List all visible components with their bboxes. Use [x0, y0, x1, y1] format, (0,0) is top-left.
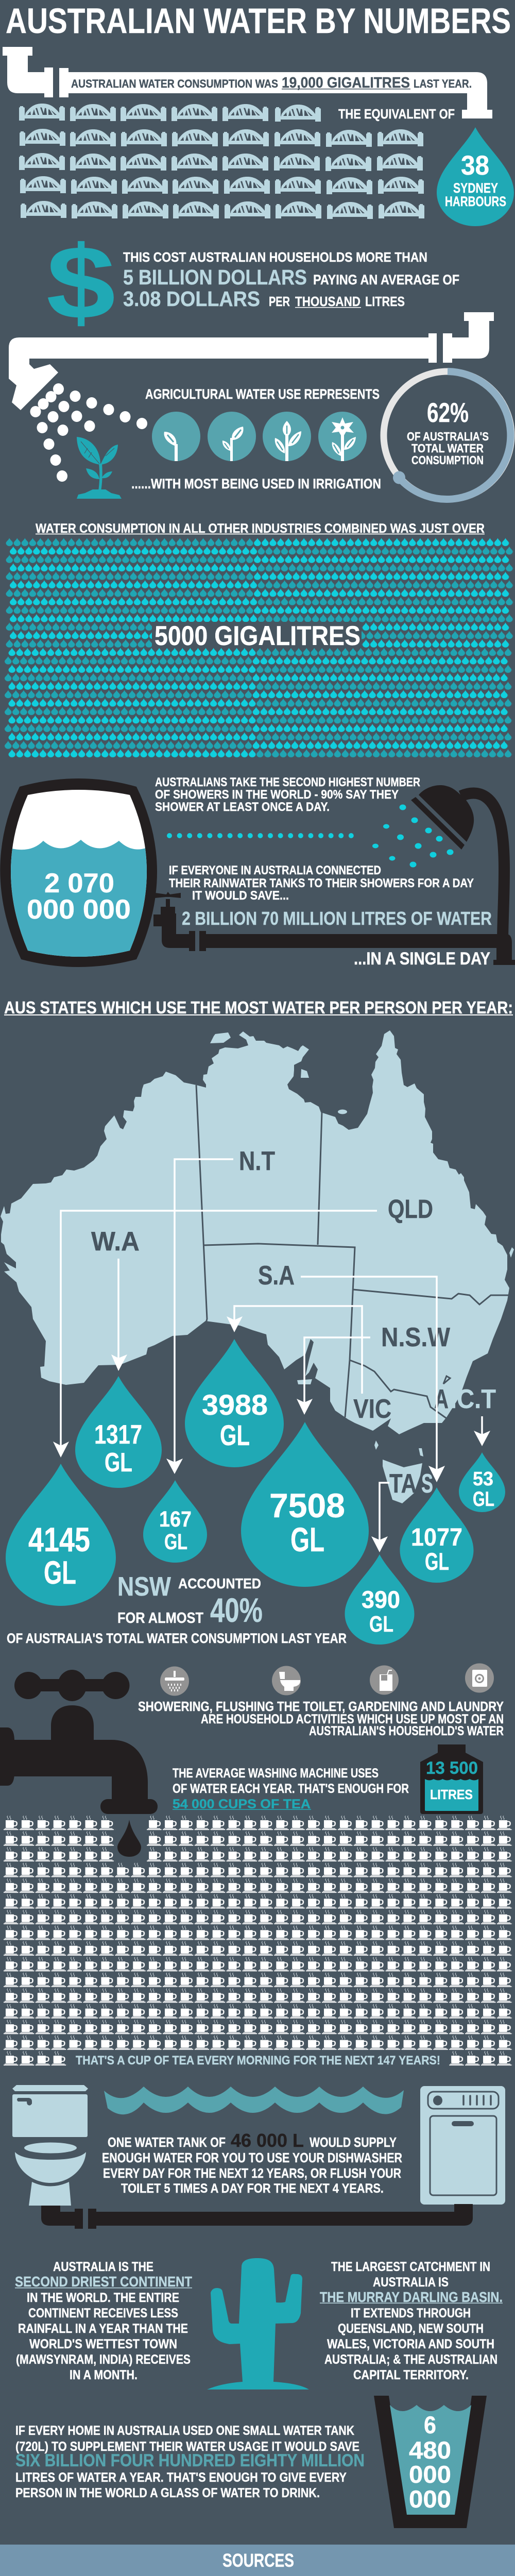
state values: GL — [473, 1488, 494, 1511]
water tank text: EVERY DAY FOR THE NEXT 12 YEARS, OR FLUSH YOUR — [103, 2165, 401, 2181]
water tank text: WOULD SUPPLY — [310, 2134, 397, 2150]
icon: toilet — [12, 2085, 88, 2206]
icon: glass of water: 480 — [409, 2436, 451, 2464]
rainwater savings text — [169, 863, 492, 969]
small tank text — [15, 2424, 365, 2500]
cost text: THOUSAND — [295, 294, 360, 309]
map labels: QLD — [388, 1194, 433, 1224]
icon: irrigation pipe — [9, 312, 494, 410]
consumption statement: 19,000 GIGALITRES — [282, 75, 410, 91]
map labels: .C.T — [450, 1384, 496, 1414]
chart: 62 percent ring: 62% — [427, 398, 469, 428]
driest continent text: SECOND DRIEST CONTINENT — [15, 2274, 192, 2290]
icon: washing machine — [465, 1663, 494, 1693]
driest continent text: AUSTRALIA IS THE — [53, 2260, 153, 2274]
map labels — [91, 1146, 496, 1499]
cost text — [123, 249, 459, 311]
sources heading: SOURCES — [222, 2550, 294, 2571]
NSW share callout: OF AUSTRALIA'S TOTAL WATER CONSUMPTION LAST YEAR — [7, 1631, 347, 1646]
icon: water waves — [104, 2087, 404, 2114]
icon: plant growth stage 1 — [152, 412, 200, 461]
icon: 13 500 litres bottle — [420, 1744, 483, 1814]
map labels: N.T — [239, 1146, 275, 1176]
state values: GL — [290, 1520, 324, 1558]
water tank text: TOILET 5 TIMES A DAY FOR THE NEXT 4 YEARS. — [121, 2181, 384, 2196]
state drops — [6, 1339, 505, 1645]
NSW share callout: FOR ALMOST — [117, 1610, 203, 1626]
panel: other industries — [5, 521, 513, 758]
murray darling text: CAPITAL TERRITORY. — [353, 2368, 469, 2382]
icon: cactus — [207, 2258, 309, 2389]
connector arrows — [53, 1159, 490, 1552]
panel: showers and rainwater — [0, 775, 515, 979]
driest continent text — [15, 2260, 192, 2382]
water tank text: ONE WATER TANK OF — [108, 2134, 226, 2150]
small tank text: SIX BILLION FOUR HUNDRED EIGHTY MILLION — [15, 2451, 365, 2470]
icon: seedling — [77, 437, 122, 499]
consumption statement — [71, 75, 472, 91]
icon: 13 500 litres bottle: 13 500 — [426, 1758, 478, 1778]
small tank text: IF EVERY HOME IN AUSTRALIA USED ONE SMALL WATER TANK — [15, 2424, 354, 2438]
panel: household cost — [46, 224, 459, 341]
map labels: S.A — [258, 1261, 295, 1291]
panel: water tank — [12, 2085, 505, 2229]
consumption statement: LAST YEAR. — [414, 77, 472, 90]
state values: 1317 — [94, 1420, 142, 1450]
driest continent text: IN A MONTH. — [70, 2368, 138, 2382]
icon: dollar sign: $ — [46, 224, 115, 341]
rainwater savings text: ...IN A SINGLE DAY — [354, 949, 490, 969]
panel: household activities — [0, 1663, 513, 2067]
driest continent text: CONTINENT RECEIVES LESS — [28, 2306, 178, 2320]
panel: dry continent — [15, 2258, 503, 2389]
state values: 53 — [473, 1468, 493, 1490]
small tank text: (720L) TO SUPPLEMENT THEIR WATER USAGE IT WOULD SAVE — [15, 2439, 359, 2454]
shower statistic text: OF SHOWERS IN THE WORLD - 90% SAY THEY — [155, 788, 399, 802]
shower statistic text — [155, 775, 420, 814]
irrigation caption: ......WITH MOST BEING USED IN IRRIGATION — [131, 476, 381, 492]
map labels: A — [434, 1384, 449, 1414]
icon: plant growth stage 3 — [263, 412, 311, 461]
chart: 62 percent ring: TOTAL WATER — [411, 442, 484, 455]
panel: state map — [1, 998, 514, 1646]
icon: plant growth stage 2 — [208, 412, 256, 461]
state values: GL — [425, 1548, 449, 1575]
icon: toilet — [272, 1666, 301, 1695]
panel: small water tank — [15, 2396, 487, 2528]
cost text: 5 BILLION DOLLARS — [123, 265, 307, 289]
pictogram: cups of tea — [4, 1816, 513, 2067]
murray darling text: AUSTRALIA IS — [373, 2275, 449, 2290]
water tank text: 46 000 L — [231, 2130, 304, 2151]
small tank text: LITRES OF WATER A YEAR. THAT'S ENOUGH TO GIVE EVERY — [15, 2470, 347, 2485]
icon: connecting pipe — [41, 2204, 473, 2229]
driest continent text: (MAWSYNRAM, INDIA) RECEIVES — [16, 2352, 191, 2367]
map labels: VIC — [353, 1394, 391, 1424]
NSW share callout: NSW — [117, 1572, 171, 1602]
state values: GL — [369, 1612, 393, 1637]
state values: 4145 — [28, 1520, 90, 1558]
icon: tap — [0, 1670, 158, 1857]
pictogram: harbour bridges — [19, 104, 424, 219]
panel: sources — [0, 2545, 515, 2576]
murray darling text: IT EXTENDS THROUGH — [351, 2306, 471, 2320]
icon: rainwater tank: 000 000 — [27, 894, 131, 925]
murray darling text: QUEENSLAND, NEW SOUTH — [338, 2321, 484, 2336]
callout: 38 sydney harbours drop: SYDNEY — [453, 180, 498, 196]
icon: glass of water: 000 — [409, 2485, 451, 2513]
washing machine text: 54 000 CUPS OF TEA — [173, 1797, 311, 1811]
household activities text — [138, 1699, 504, 1738]
driest continent text: RAINFALL IN A YEAR THAN THE — [18, 2321, 188, 2336]
shower statistic text: SHOWER AT LEAST ONCE A DAY. — [155, 800, 330, 814]
icon: 13 500 litres bottle: LITRES — [430, 1787, 473, 1802]
small tank text: PERSON IN THE WORLD A GLASS OF WATER TO DRINK. — [15, 2486, 320, 2500]
panel: national consumption — [3, 47, 514, 226]
state values: 3988 — [202, 1388, 268, 1421]
state values: 1077 — [411, 1524, 462, 1551]
state values: GL — [105, 1448, 132, 1478]
washing machine text: THE AVERAGE WASHING MACHINE USES — [173, 1766, 379, 1781]
icon: glass of water: 6 — [424, 2411, 436, 2438]
icon: white pipe — [3, 47, 492, 118]
chart: 62 percent ring: CONSUMPTION — [411, 453, 484, 467]
icon: shower head and pipes — [153, 785, 515, 965]
state values: GL — [44, 1555, 76, 1591]
tea caption: THAT'S A CUP OF TEA EVERY MORNING FOR THE NEXT 147 YEARS! — [76, 2054, 440, 2067]
pictogram: drops grid — [5, 538, 513, 758]
panel: agriculture — [9, 312, 511, 499]
shower statistic text: AUSTRALIANS TAKE THE SECOND HIGHEST NUMBER — [155, 775, 420, 789]
callout: 38 sydney harbours drop — [437, 127, 514, 226]
icon: shower water drops — [167, 805, 453, 868]
icon: garden watering — [370, 1665, 399, 1695]
driest continent text: WORLD'S WETTEST TOWN — [29, 2337, 177, 2351]
icon: glass of water — [374, 2396, 487, 2528]
icon: rainwater tank: 2 070 — [44, 868, 114, 899]
rainwater savings text: IF EVERYONE IN AUSTRALIA CONNECTED — [169, 863, 381, 877]
callout: 38 sydney harbours drop: 38 — [461, 150, 489, 181]
NSW share callout: 40% — [210, 1591, 263, 1629]
map labels: TA — [389, 1469, 417, 1499]
murray darling text — [320, 2260, 503, 2382]
cost text: THIS COST AUSTRALIAN HOUSEHOLDS MORE THAN — [123, 249, 427, 265]
rainwater savings text: IT WOULD SAVE... — [192, 889, 289, 903]
state values: GL — [220, 1419, 250, 1451]
map labels: N.S.W — [381, 1323, 451, 1352]
equivalent label: THE EQUIVALENT OF — [338, 106, 455, 122]
map labels: S — [421, 1469, 433, 1499]
icon: shower — [160, 1666, 189, 1696]
agricultural heading: AGRICULTURAL WATER USE REPRESENTS — [145, 386, 380, 402]
cost text: 3.08 DOLLARS — [123, 287, 260, 311]
state values: 390 — [362, 1586, 400, 1613]
icon: plant growth stage 4 flower — [318, 412, 367, 461]
cost text: PER — [269, 294, 290, 309]
chart: 62 percent ring — [384, 371, 511, 499]
consumption statement: AUSTRALIAN WATER CONSUMPTION WAS — [71, 77, 278, 90]
cost text: PAYING AN AVERAGE OF — [313, 272, 459, 287]
murray darling text: WALES, VICTORIA AND SOUTH — [327, 2337, 494, 2351]
map labels: W.A — [91, 1227, 140, 1257]
5000 gigalitres figure: 5000 GIGALITRES — [154, 621, 360, 651]
state values: 7508 — [269, 1486, 345, 1524]
state values: GL — [164, 1530, 187, 1554]
NSW share callout — [7, 1572, 347, 1646]
icon: dishwasher — [420, 2086, 505, 2205]
state values — [28, 1388, 494, 1637]
water tank text — [102, 2130, 402, 2196]
icon: water droplets — [30, 383, 147, 482]
washing machine text — [173, 1766, 409, 1811]
icon: glass of water: 000 — [409, 2461, 451, 2488]
icon: rainwater tank — [0, 778, 157, 979]
cost text: LITRES — [365, 294, 405, 309]
washing machine text: OF WATER EACH YEAR. THAT'S ENOUGH FOR — [173, 1782, 409, 1796]
chart: 62 percent ring: OF AUSTRALIA'S — [407, 430, 489, 443]
water tank text: ENOUGH WATER FOR YOU TO USE YOUR DISHWASHER — [102, 2150, 402, 2165]
NSW share callout: ACCOUNTED — [178, 1575, 261, 1591]
map of Australia — [1, 1030, 514, 1503]
state values: 167 — [159, 1507, 192, 1532]
driest continent text: IN THE WORLD. THE ENTIRE — [27, 2291, 179, 2305]
